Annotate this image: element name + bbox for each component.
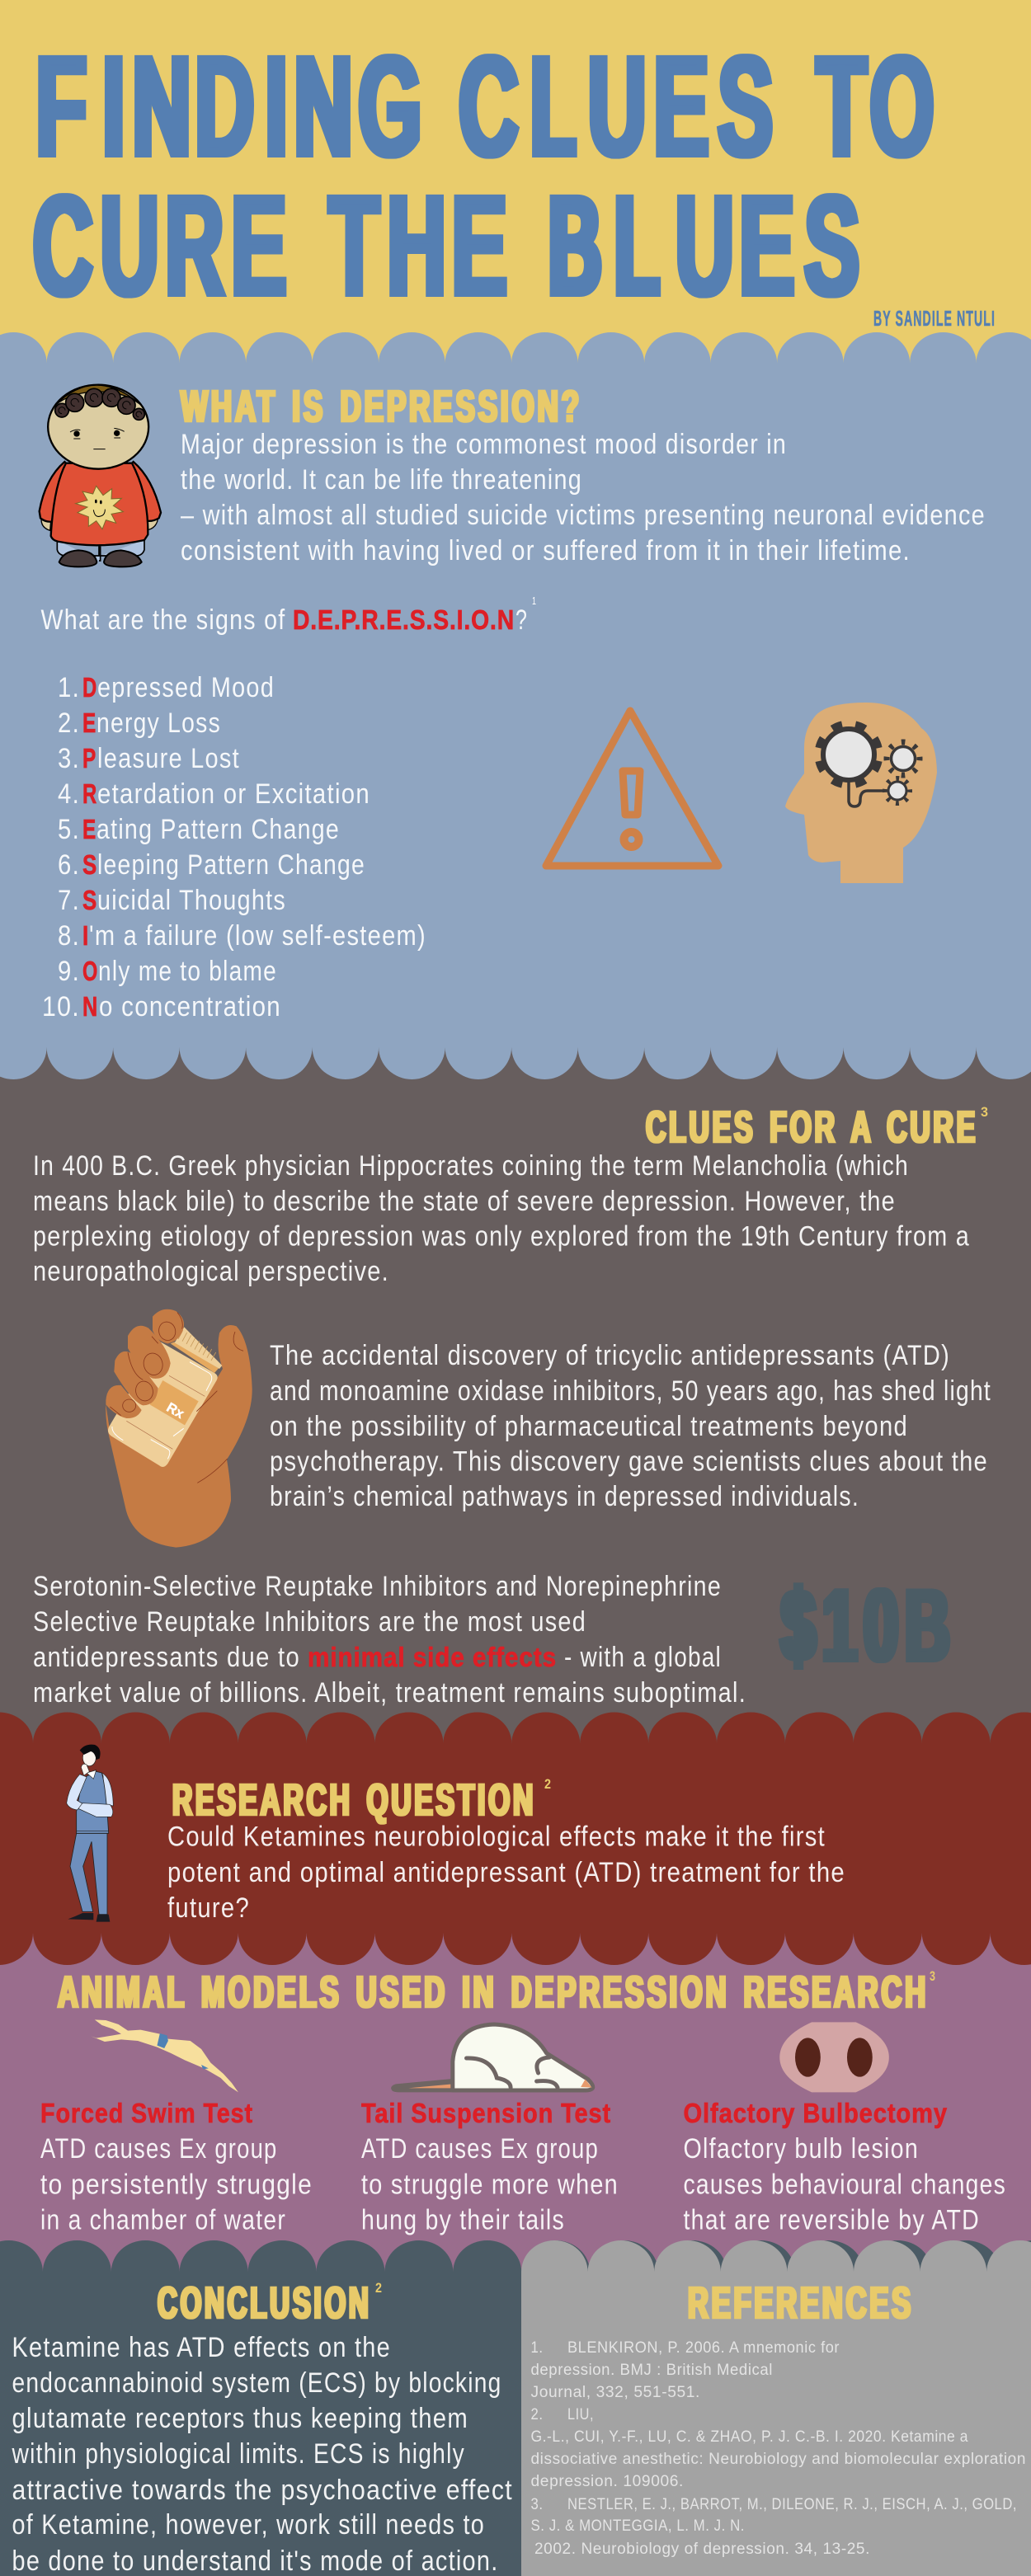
column: olfactory bulbectomy (683, 2098, 1006, 2236)
panel: title header (0, 0, 1031, 371)
column: olfactory bulbectomy: Olfactory Bulbectomy (683, 2098, 948, 2128)
text block: conclusion: of Ketamine, however, work still needs to (12, 2509, 485, 2541)
column: forced swim test (40, 2098, 313, 2236)
text block: SSRIs and SNRIs: Serotonin-Selective Reuptake Inhibitors and Norepinephrine (33, 1571, 722, 1602)
text block: conclusion: glutamate receptors thus keeping them (12, 2403, 468, 2434)
text block: conclusion: attractive towards the psychoactive effect (12, 2475, 513, 2506)
list: signs of depression: 4. (58, 778, 80, 810)
list: signs of depression: 3. (58, 743, 80, 774)
text block: SSRIs and SNRIs: Selective Reuptake Inhibitors are the most used (33, 1606, 586, 1638)
text block: conclusion: within physiological limits. ECS is highly (12, 2438, 465, 2470)
list: signs of depression: R (82, 778, 97, 809)
list: signs of depression: 7. (58, 885, 80, 916)
text block: accidental discovery: brain’s chemical pathways in depressed individuals. (270, 1481, 859, 1512)
text block: reference list: 2002. Neurobiology of depression. 34, 13-25. (534, 2541, 870, 2558)
list: signs of depression: uicidal Thoughts (97, 885, 286, 916)
column: tail suspension test (361, 2098, 619, 2236)
list: signs of depression (42, 672, 426, 1022)
heading: conclusion (158, 2278, 382, 2328)
icon: sad cartoon person (40, 385, 161, 566)
text block: reference list (531, 2339, 1026, 2558)
text block: SSRIs and SNRIs (33, 1571, 746, 1709)
column: forced swim test: in a chamber of water (40, 2205, 286, 2236)
icon: hand holding pill bottle: Rx (164, 1399, 187, 1422)
text block: reference list: depression. 109006. (531, 2473, 684, 2490)
heading: what is depression: WHAT IS DEPRESSION? (181, 382, 582, 431)
icon: warning triangle (546, 711, 718, 866)
text block: conclusion: be done to understand it's mode of action. (12, 2545, 498, 2576)
text block: Hippocrates history: neuropathological perspective. (33, 1256, 389, 1287)
list: signs of depression: 2. (58, 707, 80, 739)
list: signs of depression: etardation or Excitation (97, 778, 370, 810)
text: signs question: ? (516, 604, 528, 636)
list: signs of depression: 9. (58, 956, 80, 987)
list: signs of depression: E (82, 707, 97, 738)
list: signs of depression: leasure Lost (97, 743, 240, 774)
panel: clues for a cure (0, 1039, 1031, 1748)
text block: SSRIs and SNRIs: - with a global (564, 1642, 722, 1673)
text block: reference list: dissociative anesthetic: Neurobiology and biomolecular exploration (531, 2451, 1026, 2468)
column: tail suspension test: ATD causes Ex group (361, 2133, 599, 2165)
panel: what is depression (0, 332, 1031, 1079)
heading: conclusion: CONCLUSION (158, 2278, 371, 2328)
text block: reference list: depression. BMJ : British Medical (531, 2362, 773, 2379)
text block: conclusion: Ketamine has ATD effects on the (12, 2332, 391, 2363)
panel: animal models (0, 1930, 1031, 2276)
list: signs of depression: 6. (58, 849, 80, 881)
title (35, 31, 932, 321)
text block: accidental discovery (270, 1340, 991, 1512)
text block: conclusion (12, 2332, 513, 2576)
title: CURE THE BLUES (35, 171, 858, 321)
heading: research question: 2 (544, 1776, 551, 1792)
text block: depression definition: the world. It can be life threatening (181, 464, 582, 496)
text block: research question (167, 1821, 845, 1924)
list: signs of depression: 8. (58, 920, 80, 952)
text block: conclusion: endocannabinoid system (ECS) by blocking (12, 2367, 501, 2399)
text block: reference list: LIU, (567, 2406, 594, 2423)
column: tail suspension test: Tail Suspension Test (361, 2098, 611, 2128)
list: signs of depression: 5. (58, 814, 80, 845)
column: forced swim test: to persistently struggle (40, 2169, 313, 2200)
list: signs of depression: P (82, 743, 97, 773)
heading: research question: RESEARCH QUESTION (172, 1775, 536, 1825)
icon: pig snout (779, 2022, 889, 2092)
list: signs of depression: N (82, 991, 98, 1022)
column: forced swim test: ATD causes Ex group (40, 2133, 277, 2165)
text: signs question: What are the signs of (41, 604, 285, 636)
text: signs question (41, 595, 536, 636)
text block: reference list: S. J. & MONTEGGIA, L. M. J. N. (531, 2517, 745, 2535)
text block: SSRIs and SNRIs: antidepressants due to (33, 1642, 300, 1673)
text block: reference list: G.-L., CUI, Y.-F., LU, C. & ZHAO, P. J. C.-B. I. 2020. Ketamine a (531, 2428, 968, 2446)
panel: references (521, 2240, 1031, 2576)
text block: depression definition: consistent with having lived or suffered from it in their lifetime. (181, 535, 911, 566)
text block: SSRIs and SNRIs: market value of billions. Albeit, treatment remains suboptimal. (33, 1677, 746, 1709)
list: signs of depression: S (82, 849, 97, 880)
list: signs of depression: 1. (58, 672, 80, 703)
text block: research question: potent and optimal antidepressant (ATD) treatment for the (167, 1857, 845, 1888)
list: signs of depression: E (82, 814, 97, 844)
icon: head with gears (785, 703, 937, 883)
list: signs of depression: S (82, 885, 97, 915)
list: signs of depression: nergy Loss (97, 707, 221, 739)
list: signs of depression: 10. (42, 991, 80, 1022)
text block: reference list: 2. (531, 2406, 543, 2423)
icon: mouse (391, 2024, 593, 2092)
title: FINDING CLUES TO (37, 31, 932, 181)
column: tail suspension test: hung by their tails (361, 2205, 565, 2236)
list: signs of depression: ating Pattern Change (97, 814, 340, 845)
icon: hand holding pill bottle (106, 1309, 252, 1548)
text block: Hippocrates history: means black bile) to describe the state of severe depression. However, the (33, 1186, 896, 1217)
text block: reference list: BLENKIRON, P. 2006. A mnemonic for (567, 2339, 840, 2357)
list: signs of depression: I (82, 920, 89, 951)
text block: reference list: Journal, 332, 551-551. (531, 2384, 700, 2401)
text block: accidental discovery: on the possibility of pharmaceutical treatments beyond (270, 1411, 908, 1442)
text block: reference list: 1. (531, 2339, 543, 2357)
list: signs of depression: leeping Pattern Change (97, 849, 365, 881)
list: signs of depression: 'm a failure (low self-esteem) (89, 920, 426, 952)
text block: Hippocrates history (33, 1150, 970, 1287)
icon: thinking man (67, 1745, 113, 1922)
column: olfactory bulbectomy: Olfactory bulb lesion (683, 2133, 919, 2165)
heading: animal models: 3 (930, 1968, 935, 1984)
text block: depression definition: Major depression is the commonest mood disorder in (181, 429, 787, 460)
panel: research question (0, 1712, 1031, 1965)
text: signs question: 1 (532, 595, 536, 607)
text: signs question: D.E.P.R.E.S.S.I.O.N (293, 604, 515, 635)
list: signs of depression: O (82, 956, 98, 986)
column: tail suspension test: to struggle more when (361, 2169, 619, 2200)
heading: conclusion: 2 (375, 2280, 382, 2296)
icon: swimmer (91, 2019, 238, 2092)
column: olfactory bulbectomy: that are reversible by ATD (683, 2205, 980, 2236)
text block: reference list: 3. (531, 2496, 543, 2513)
text block: research question: Could Ketamines neurobiological effects make it the first (167, 1821, 826, 1852)
heading: research question (172, 1775, 551, 1825)
list: signs of depression: epressed Mood (97, 672, 275, 703)
panel: conclusion (0, 2240, 1031, 2576)
text block: SSRIs and SNRIs: minimal side effects (308, 1642, 557, 1672)
list: signs of depression: D (82, 672, 97, 703)
list: signs of depression: o concentration (99, 991, 281, 1022)
heading: clues for a cure: 3 (981, 1104, 988, 1120)
list: signs of depression: nly me to blame (98, 956, 277, 987)
column: forced swim test: Forced Swim Test (40, 2098, 253, 2128)
text block: research question: future? (167, 1892, 250, 1924)
text block: depression definition (181, 429, 986, 566)
